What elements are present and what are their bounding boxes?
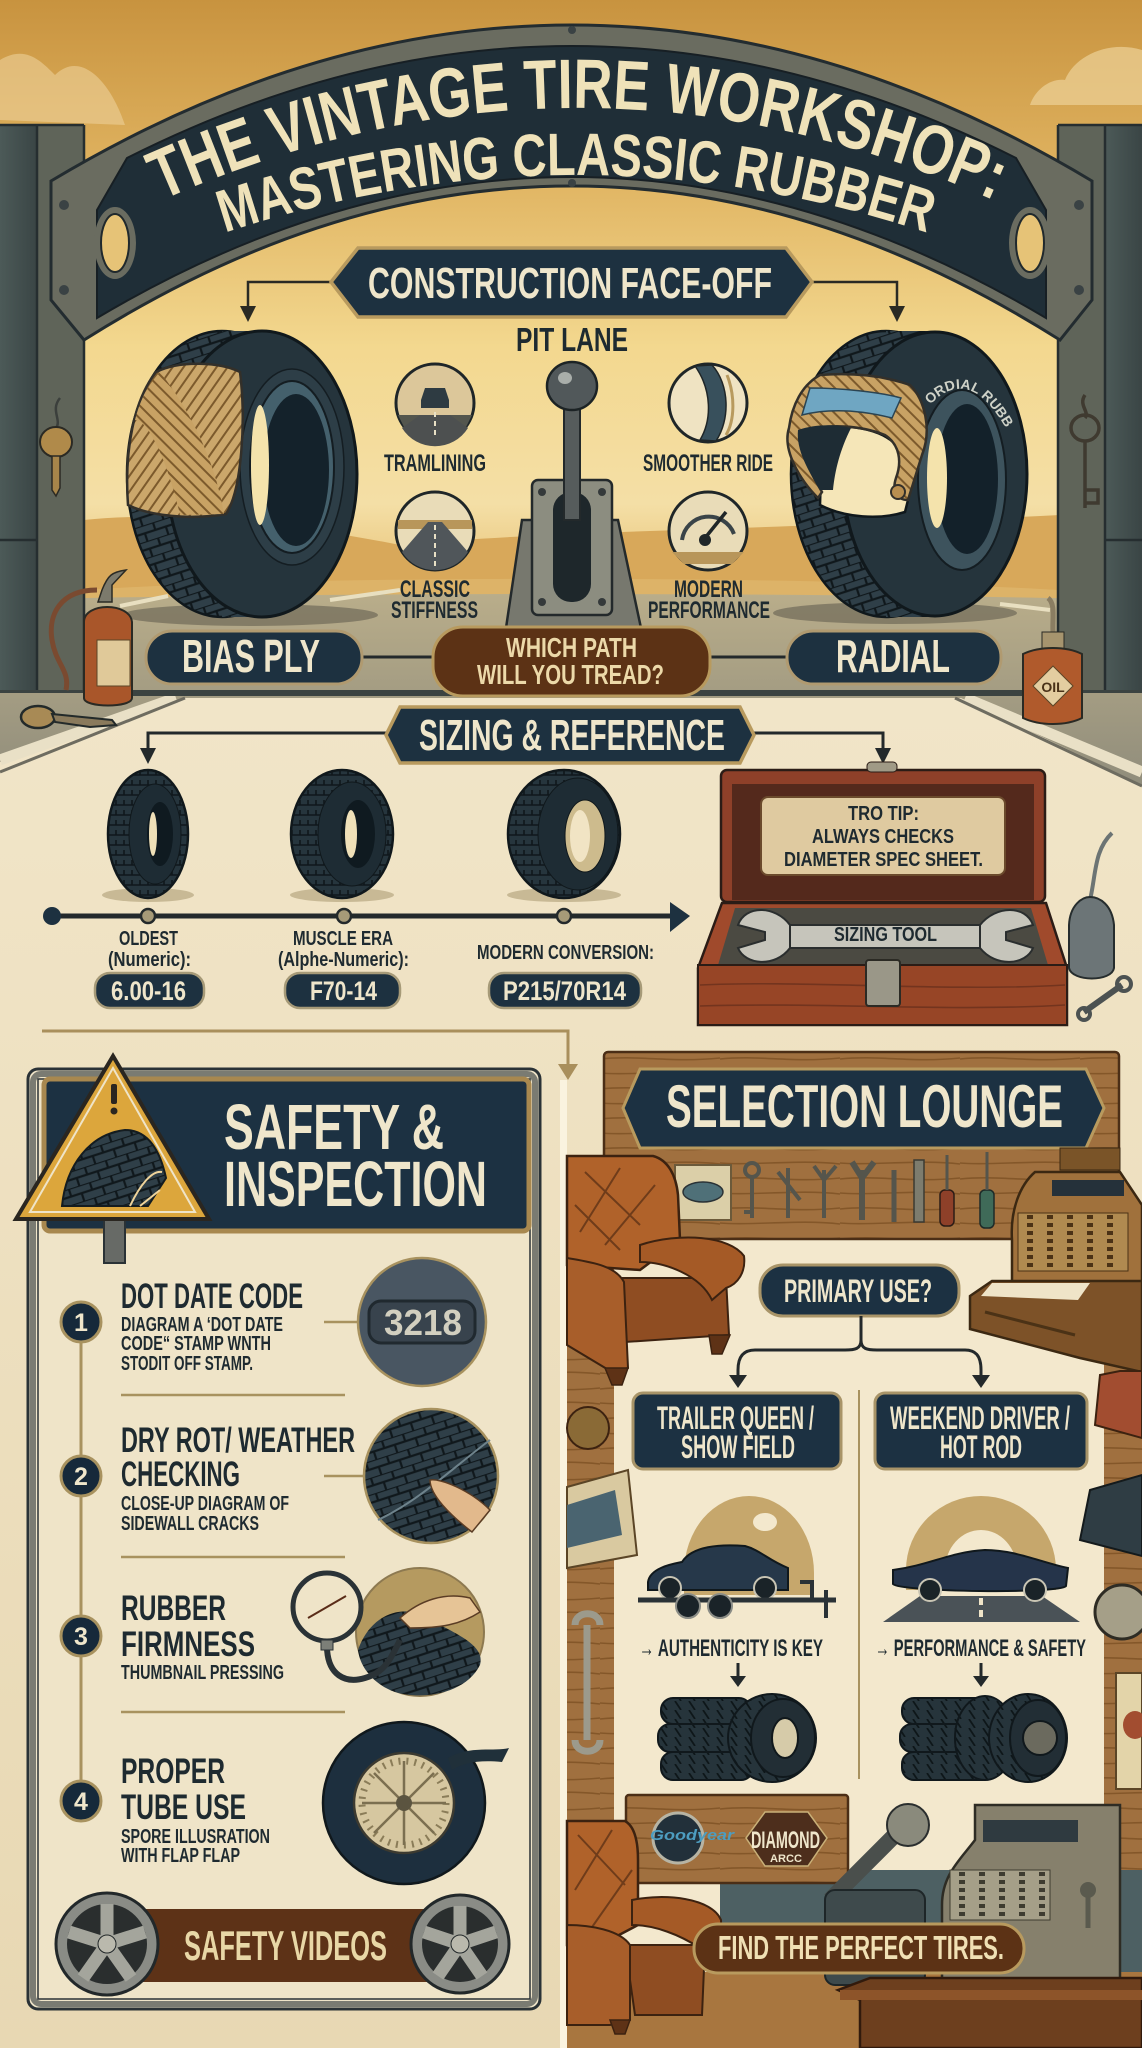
label: modern performance: MODERN <box>674 576 743 603</box>
down arrows <box>730 1663 989 1687</box>
armchair top <box>567 1156 744 1385</box>
step 3: rubber firmness: FIRMNESS <box>121 1625 255 1664</box>
icon: oil can and spanner <box>1069 833 1131 1020</box>
label: classic stiffness: CLASSIC <box>400 576 470 603</box>
small tire: oldest <box>102 770 194 902</box>
safety videos bar <box>56 1893 509 1995</box>
size code: P215/70R14: P215/70R14 <box>503 976 626 1006</box>
step 3: rubber firmness <box>61 1568 484 1696</box>
step 3: rubber firmness: RUBBER <box>121 1589 226 1628</box>
tip plate <box>761 797 1005 875</box>
label: modern performance <box>648 576 770 624</box>
gate pillars <box>0 125 1142 692</box>
step 4: proper tube use: 4 <box>74 1788 88 1816</box>
pill: find the perfect tires <box>694 1924 1024 1973</box>
small tire: muscle era <box>290 770 394 902</box>
brands sign <box>626 1795 848 1883</box>
section badge: sizing and reference: SIZING & REFERENCE <box>419 711 725 760</box>
tire stack: performance <box>900 1694 1067 1782</box>
cut-away cream opening <box>820 427 908 517</box>
step 2: dry rot: SIDEWALL CRACKS <box>121 1513 259 1535</box>
tan ply cutaway <box>127 364 243 517</box>
step 2: dry rot: DRY ROT/ WEATHER <box>121 1421 355 1460</box>
label: smoother ride: SMOOTHER RIDE <box>643 450 773 477</box>
step 1: dot date code: CODE“ STAMP WNTH <box>121 1333 271 1355</box>
step 2: dry rot: CLOSE-UP DIAGRAM OF <box>121 1493 289 1515</box>
sidewall lettering: ORDIAL RUBB <box>926 379 1012 426</box>
step 1: dot date code: DIAGRAM A ‘DOT DATE <box>121 1314 283 1336</box>
label: authenticity is key: → AUTHENTICITY IS KEY <box>639 1635 823 1662</box>
ply layers <box>787 374 927 500</box>
title: THE VINTAGE TIRE WORKSHOP: <box>143 60 1004 198</box>
step 1: dot date code: STODIT OFF STAMP. <box>121 1353 253 1375</box>
tip plate: ALWAYS CHECKS <box>812 826 954 848</box>
label: modern conversion: MODERN CONVERSION: <box>477 942 654 964</box>
wrench <box>738 910 1033 962</box>
film reel left <box>56 1893 158 1995</box>
lounge side walls <box>567 1240 1142 1990</box>
size code: F70-14: F70-14 <box>310 976 377 1006</box>
toolbox <box>698 762 1067 1025</box>
label: classic stiffness: STIFFNESS <box>391 597 478 624</box>
icon: oil tin: OIL <box>1041 679 1065 695</box>
bias ply tire cutaway <box>122 331 378 626</box>
arch right bracket hole <box>1009 207 1051 279</box>
illustration: vintage car on trailer <box>638 1496 836 1618</box>
step 3: rubber firmness: THUMBNAIL PRESSING <box>121 1662 284 1684</box>
box: weekend driver <box>875 1393 1087 1469</box>
floor with road stripes <box>0 690 1142 2048</box>
section badge: construction face-off <box>240 248 905 322</box>
label: oldest <box>108 928 191 971</box>
step 1: dot date code: 1 <box>74 1309 88 1337</box>
film reel right <box>411 1895 509 1993</box>
icon: tramlining <box>396 364 474 446</box>
label: oldest: OLDEST <box>119 928 178 950</box>
background: sky and road <box>0 0 1142 790</box>
step 4: proper tube use <box>61 1722 509 1884</box>
step 4: proper tube use: WITH FLAP FLAP <box>121 1845 240 1867</box>
gear shifter <box>506 362 641 628</box>
title arch <box>50 24 1094 342</box>
desk <box>838 1978 1142 2048</box>
subtitle: MASTERING CLASSIC RUBBER <box>216 134 934 232</box>
step 2: dry rot <box>61 1409 498 1543</box>
cash register bottom <box>905 1805 1120 2005</box>
pill: which path: WILL YOU TREAD? <box>477 659 664 690</box>
side props on right wall <box>1080 1371 1142 1789</box>
step 3: rubber firmness: 3 <box>74 1623 88 1651</box>
step 1: dot date code <box>61 1258 486 1386</box>
label: muscle era: (Alphe-Numeric): <box>278 949 409 971</box>
icon: modern performance <box>669 492 747 570</box>
tip plate: TRO TIP: <box>848 803 919 825</box>
label: classic stiffness <box>391 576 478 624</box>
wrench: SIZING TOOL <box>834 924 937 946</box>
box: trailer queen <box>633 1393 841 1469</box>
step 1: dot date code: DOT DATE CODE <box>121 1277 303 1316</box>
brands sign: DIAMOND <box>751 1827 820 1854</box>
icon: fuel can <box>51 570 132 706</box>
icon: dropped key <box>21 706 116 728</box>
pill: which path: WHICH PATH <box>506 632 637 663</box>
panel: selection lounge <box>560 1052 1142 2048</box>
pill: primary use <box>760 1265 959 1316</box>
label: muscle era <box>278 928 409 971</box>
gear lever prop <box>825 1804 929 1985</box>
heading: pit lane: PIT LANE <box>516 321 628 358</box>
timeline <box>43 902 690 932</box>
section badge: sizing and reference <box>140 707 891 764</box>
tip plate: DIAMETER SPEC SHEET. <box>784 849 983 871</box>
small tire: modern <box>507 770 621 902</box>
safety videos bar: SAFETY VIDEOS <box>184 1922 387 1969</box>
label: modern performance: PERFORMANCE <box>648 597 770 624</box>
step 4: proper tube use: PROPER <box>121 1752 225 1791</box>
cash register top <box>970 1148 1142 1372</box>
step 4: proper tube use: TUBE USE <box>121 1788 246 1827</box>
size code: 6.00-16: 6.00-16 <box>111 976 186 1006</box>
icon: classic stiffness <box>396 492 474 570</box>
label: muscle era: MUSCLE ERA <box>293 928 393 950</box>
warning sign icon <box>16 1056 209 1263</box>
side props on left wall <box>567 1407 637 1751</box>
icon: smoother ride <box>669 364 747 442</box>
step 4: proper tube use: SPORE ILLUSRATION <box>121 1826 270 1848</box>
brands sign: Goodyear <box>650 1827 735 1844</box>
step 2: dry rot: 2 <box>74 1463 88 1491</box>
pill: which path <box>433 627 710 696</box>
step 2: dry rot: CHECKING <box>121 1455 240 1494</box>
icon: oil tin <box>1023 598 1082 724</box>
wainscot and floor <box>567 1870 1142 2048</box>
icon: hanging key left <box>40 398 72 496</box>
label: tramlining: TRAMLINING <box>384 450 486 477</box>
section badge: construction face-off: CONSTRUCTION FACE-OFF <box>368 259 772 308</box>
illustration: hot rod on road <box>883 1496 1080 1622</box>
icon: hanging key right <box>1071 395 1099 508</box>
brands sign: ARCC <box>770 1853 802 1865</box>
pill: bias ply: BIAS PLY <box>182 630 320 682</box>
pill: primary use: PRIMARY USE? <box>784 1273 932 1309</box>
box: trailer queen: TRAILER QUEEN / <box>657 1400 814 1436</box>
wooden sign with tool rack <box>604 1052 1119 1239</box>
arch left bracket hole <box>94 207 136 279</box>
header plate: INSPECTION <box>224 1148 487 1220</box>
header plate <box>44 1079 529 1231</box>
box: weekend driver: HOT ROD <box>940 1429 1022 1465</box>
step 1: dot date code: 3218 <box>384 1302 462 1343</box>
radial tire cutaway <box>773 330 1028 624</box>
box: trailer queen: SHOW FIELD <box>681 1429 795 1465</box>
label: oldest: (Numeric): <box>108 949 191 971</box>
size code: F70-14 <box>285 973 400 1008</box>
armchair bottom <box>567 1821 721 2034</box>
decision fork arrows <box>729 1316 990 1388</box>
header plate: SAFETY & <box>224 1091 444 1163</box>
pill: find the perfect tires: FIND THE PERFECT TIRES. <box>718 1929 1004 1966</box>
pill: radial: RADIAL <box>836 630 950 682</box>
pill: bias ply <box>146 630 787 684</box>
tool rack <box>675 1152 994 1228</box>
connector arrow to lower sections <box>42 1031 578 1080</box>
panel: safety and inspection <box>16 1056 540 2009</box>
tire stack: authentic <box>658 1694 816 1782</box>
